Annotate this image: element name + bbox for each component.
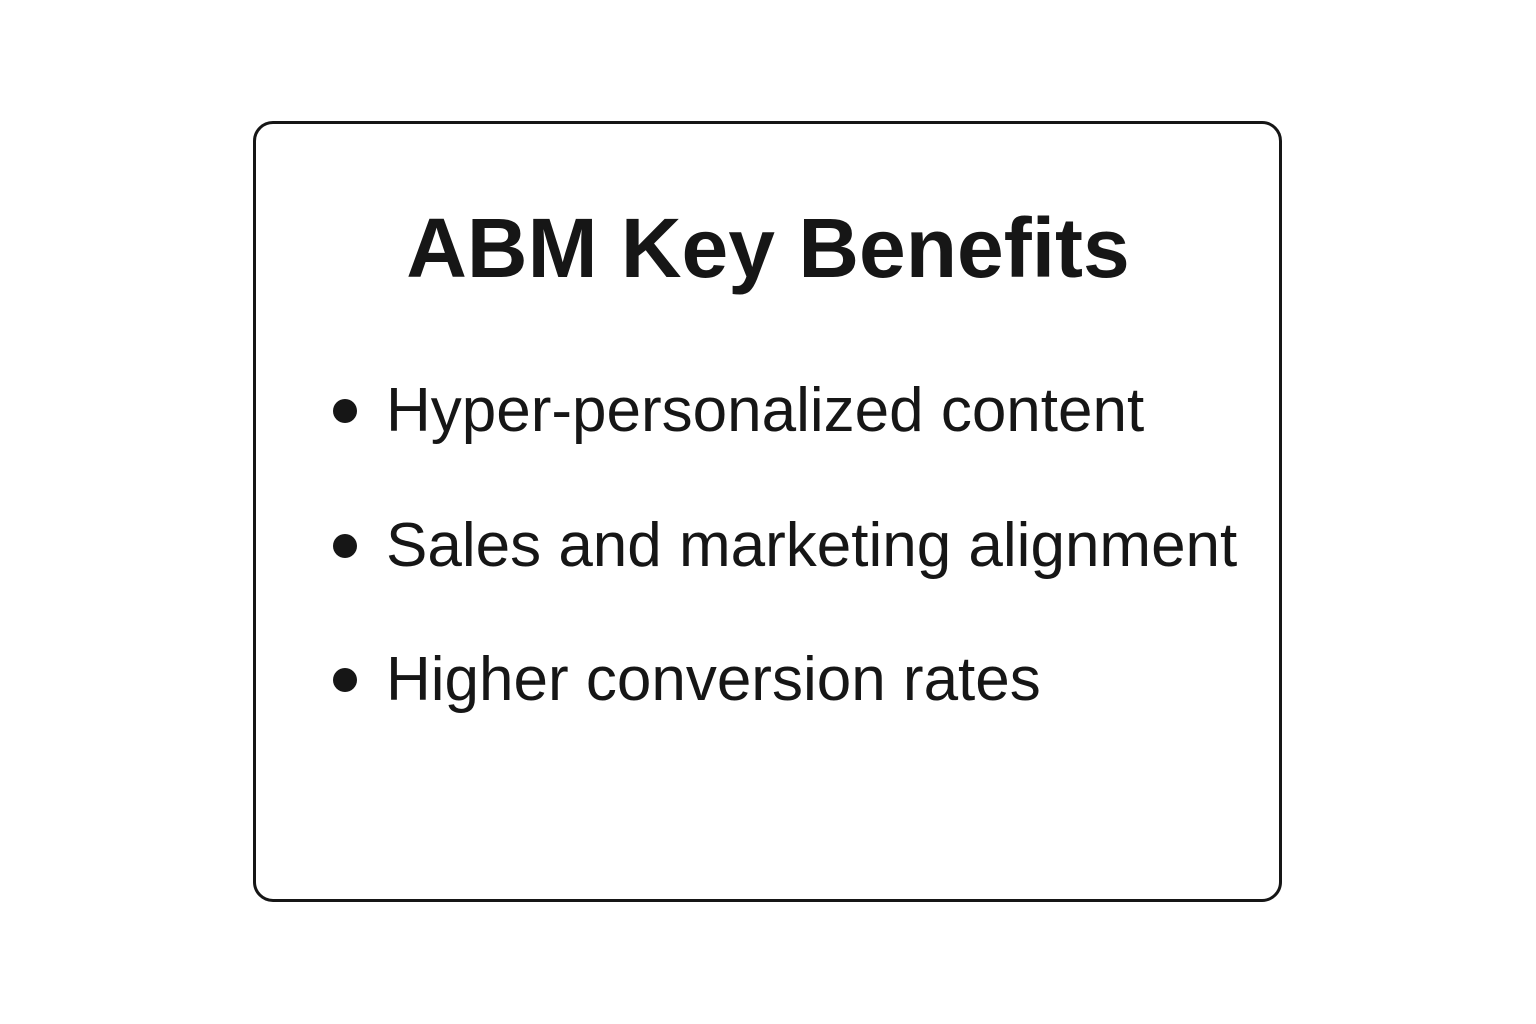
- bullet: sales and marketing alignment: Sales and marketing alignment: [386, 511, 1237, 580]
- bullet: higher conversion rates: Higher conversion rates: [386, 645, 1041, 714]
- panel: benefits card: [253, 121, 1282, 902]
- bullet: hyper-personalized content: Hyper-personalized content: [386, 376, 1144, 445]
- title: ABM Key Benefits: [406, 201, 1130, 295]
